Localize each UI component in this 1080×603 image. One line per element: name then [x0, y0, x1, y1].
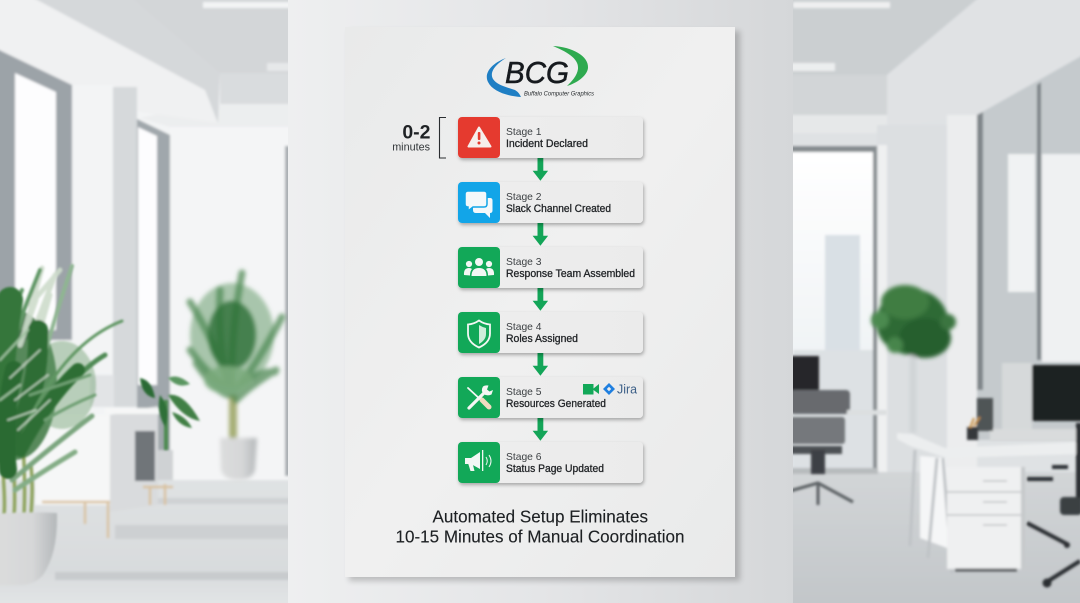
- duration label: 0-2 minutes: 0-2: [402, 122, 431, 144]
- card: stage 3: Response Team Assembled: [506, 268, 635, 280]
- background: blurred office left side: [0, 0, 295, 603]
- card: stage 4: [458, 312, 643, 353]
- text: Jira: Jira: [617, 382, 637, 396]
- card: stage 5: Stage 5: [506, 387, 542, 398]
- card: stage 1: [458, 117, 643, 158]
- icon: megaphone: [465, 450, 491, 471]
- card: stage 6: [458, 442, 643, 483]
- icon: video camera: [583, 384, 599, 394]
- icon: wrench and screwdriver: [468, 385, 493, 408]
- logo: BCG: BCG: [505, 55, 569, 90]
- plant: foreground palm in white pot: [0, 266, 122, 585]
- background: blurred office right side: [790, 0, 1080, 603]
- arrow: stage 1 to 2: [533, 158, 548, 181]
- card: stage 6: Stage 6: [506, 452, 542, 463]
- card: stage 5: Resources Generated: [506, 398, 606, 410]
- duration label: 0-2 minutes: [392, 118, 446, 158]
- card: stage 4: Stage 4: [506, 322, 542, 333]
- card: stage 3: [458, 247, 643, 288]
- foreground wall: [288, 0, 793, 603]
- card: stage 3: Stage 3: [506, 257, 542, 268]
- logo: BCG: Buffalo Computer Graphics: [524, 90, 595, 98]
- panel: poster board: [345, 27, 735, 577]
- arrow: stage 3 to 4: [533, 288, 548, 311]
- icon: chat bubbles: [465, 191, 492, 218]
- card: stage 6: Status Page Updated: [506, 463, 604, 475]
- pot: foreground: [0, 512, 57, 585]
- plant: small plant behind desk: [140, 376, 200, 450]
- closing statement: [396, 507, 684, 546]
- desk, drawers and monitor: [897, 363, 1080, 588]
- plant: mid floor palm: [190, 273, 282, 480]
- arrow: stage 5 to 6: [533, 418, 548, 441]
- card: stage 5: [458, 377, 643, 418]
- icon: warning triangle: [468, 128, 490, 146]
- arrow: stage 2 to 3: [533, 223, 548, 246]
- icon: team: [464, 258, 494, 276]
- icon: Jira diamond: [603, 383, 615, 395]
- closing statement: 10-15 Minutes of Manual Coordination: [396, 526, 684, 546]
- icon: shield: [468, 320, 490, 348]
- panel: poster shadow: [349, 31, 740, 581]
- office chair and monitor: [790, 356, 887, 505]
- card: stage 2: Slack Channel Created: [506, 203, 611, 215]
- logo: BCG: [487, 46, 595, 98]
- card: stage 1: Stage 1: [506, 127, 542, 138]
- card: stage 2: [458, 182, 643, 223]
- arrow: stage 4 to 5: [533, 353, 548, 376]
- card: stage 2: Stage 2: [506, 192, 542, 203]
- closing statement: Automated Setup Eliminates: [432, 507, 648, 527]
- card: stage 4: Roles Assigned: [506, 333, 578, 345]
- card: stage 1: Incident Declared: [506, 138, 588, 150]
- plant: right tree: [871, 285, 956, 433]
- duration label: 0-2 minutes: minutes: [392, 142, 431, 154]
